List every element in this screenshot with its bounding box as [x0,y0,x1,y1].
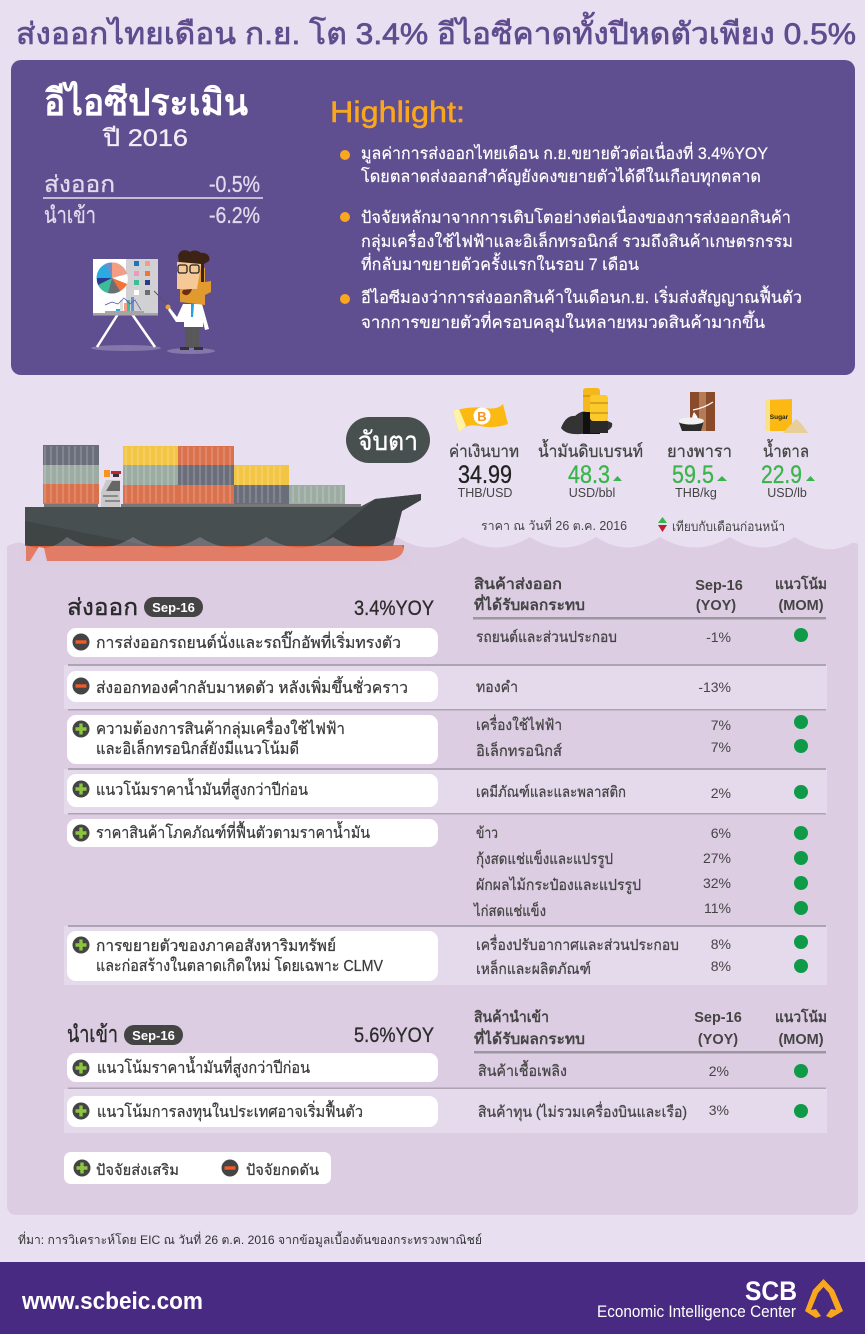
table header: imports: Sep-16 [694,1010,742,1026]
table header: exports: ที่ได้รับผลกระทบ [474,594,585,614]
bullet text 2: ที่กลับมาขยายตัวครั้งแรกในรอบ 7 เดือน [361,252,639,274]
table header: exports: Sep-16 [695,578,743,594]
icon: rubber tree and bowl [678,392,715,431]
bullet text 3 [340,285,802,333]
factor: commodity prices [67,819,438,847]
table header: exports [473,575,827,620]
forecast: imports: -6.2% [209,202,260,228]
forecast: exports: ส่งออก [44,171,115,197]
factor: import oil price: แนวโน้มราคาน้ำมันที่สูงกว่าปีก่อน [97,1056,310,1078]
bullet text 3: จากการขยายตัวที่ครอบคลุมในหลายหมวดสินค้ามากขึ้น [361,310,765,333]
indicator: rubber: THB/kg [675,486,717,500]
factor: domestic investment: แนวโน้มการลงทุนในประเทศอาจเริ่มฟื้นตัว [97,1100,363,1122]
section heading: imports: นำเข้า [67,1021,118,1047]
section heading: exports: ส่งออก [67,594,138,620]
table rows: exports: กุ้งสดแช่แข็งและแปรรูป [476,849,613,869]
factor: real estate and construction [67,931,438,981]
section heading: imports: 5.6%YOY [354,1024,434,1047]
table rows: exports: เคมีภัณฑ์และและพลาสติก [476,784,626,801]
forecast: imports: นำเข้า [44,202,96,228]
factor: passenger cars: การส่งออกรถยนต์นั่งและรถปิ๊กอัพที่เริ่มทรงตัว [96,631,401,652]
table rows: exports: เครื่องปรับอากาศและส่วนประกอบ [476,934,679,954]
factor: real estate and construction: และก่อสร้างในตลาดเกิดใหม่ โดยเฉพาะ CLMV [96,956,383,975]
table header: exports: (YOY) [696,598,736,614]
forecast: exports: -0.5% [209,171,260,197]
section heading: exports: 3.4%YOY [354,597,434,620]
panel: lower background with wave top [7,537,858,1215]
illustration: presenter with chart board [91,250,215,354]
legend: factors: ปัจจัยส่งเสริม [96,1162,179,1179]
heading: EIC forecast: อีไอซีประเมิน [44,80,248,123]
table rows: exports: 11% [704,900,731,916]
factor: electrical and electronics: ความต้องการสินค้ากลุ่มเครื่องใช้ไฟฟ้า [96,717,345,739]
forecast: imports [44,202,260,228]
indicator: brent crude: น้ำมันดิบเบรนท์ [538,439,643,461]
indicator: baht [449,404,519,500]
table rows: exports: ไก่สดแช่แข็ง [473,901,546,920]
table rows: exports: 7% [711,739,731,755]
indicator: brent crude: USD/bbl [569,486,615,500]
forecast: exports [44,171,260,197]
factor: oil price: แนวโน้มราคาน้ำมันที่สูงกว่าปีก่อน [96,778,308,800]
table header: exports: แนวโน้ม [775,575,827,593]
indicator: sugar: USD/lb [767,486,807,500]
table rows: exports: อิเล็กทรอนิกส์ [476,741,562,760]
table header: imports: (YOY) [698,1032,738,1048]
bullet text 3: อีไอซีมองว่าการส่งออกสินค้าในเดือนก.ย. เริ่มส่งสัญญาณฟื้นตัว [361,285,802,307]
table rows: exports: 8% [711,936,731,952]
table header: imports: สินค้านำเข้า [474,1008,549,1026]
factor: oil price [67,774,438,807]
indicator: sugar [761,399,815,500]
bullet text 1: มูลค่าการส่งออกไทยเดือน ก.ย.ขยายตัวต่อเนื่องที่ 3.4%YOY [361,142,768,164]
label pill: watch: จับตา [358,426,418,456]
indicator: sugar: น้ำตาล [763,439,809,461]
indicator: baht: 34.99 [458,461,512,489]
indicator: rubber [667,392,732,500]
legend: factors: ปัจจัยกดดัน [246,1162,319,1179]
factor: commodity prices: ราคาสินค้าโภคภัณฑ์ที่ฟื้นตัวตามราคาน้ำมัน [96,821,370,842]
table rows: exports: ทองคำ [476,679,518,696]
factor: gold [67,671,438,702]
panel: EIC forecast and highlight [11,60,855,375]
table rows: exports: เหล็กและผลิตภัณฑ์ [476,959,591,978]
table header: imports: ที่ได้รับผลกระทบ [474,1028,585,1048]
table header: imports: แนวโน้ม [775,1008,827,1026]
indicator: brent crude: 48.3 [568,461,610,489]
legend: month comparison arrows: เทียบกับเดือนก่อนหน้า [672,519,785,534]
footer [0,1262,865,1334]
heading: Highlight: Highlight: [330,96,465,129]
bullet text 1: โดยตลาดส่งออกสำคัญยังคงขยายตัวได้ดีในเกือบทุกตลาด [361,167,761,187]
table rows: exports: 7% [711,717,731,733]
table header: exports: สินค้าส่งออก [474,575,562,593]
indicator: rubber: 59.5 [672,461,714,489]
indicator: baht: THB/USD [458,486,512,500]
table header: imports: (MOM) [778,1032,824,1048]
factor: domestic investment [67,1096,438,1127]
section heading: imports: Sep-16 [132,1028,175,1043]
indicator: rubber: ยางพารา [667,442,732,461]
label pill: watch [346,417,430,463]
table rows: exports [473,628,808,978]
bullet text 2 [340,206,793,274]
table rows: exports: -13% [698,679,731,695]
table rows: imports: สินค้าเชื้อเพลิง [478,1060,567,1080]
table rows: exports: รถยนต์และส่วนประกอบ [476,629,617,646]
factor: real estate and construction: การขยายตัวของภาคอสังหาริมทรัพย์ [96,936,336,955]
row backgrounds [64,665,827,1133]
indicator: brent crude [538,388,643,500]
illustration: container ship [25,445,421,561]
table rows: exports: เครื่องใช้ไฟฟ้า [476,714,562,734]
bullet text 2: กลุ่มเครื่องใช้ไฟฟ้าและอิเล็กทรอนิกส์ รวมถึงสินค้าเกษตรกรรม [361,230,793,252]
table rows: exports: ผักผลไม้กระป๋องและแปรรูป [476,876,641,894]
factor: import oil price [67,1053,438,1082]
indicator: sugar: 22.9 [761,461,802,489]
indicator: baht: ค่าเงินบาท [449,442,519,461]
table rows: exports: ข้าว [476,825,498,842]
subheading: year: ปี 2016 [102,125,188,152]
section heading: exports [67,594,434,620]
factor: passenger cars [67,628,438,657]
table header: imports [474,1008,827,1054]
factor: gold: ส่งออกทองคำกลับมาหดตัว หลังเพิ่มขึ้นชั่วคราว [96,676,408,697]
source note: ที่มา: การวิเคราะห์โดย EIC ณ วันที่ 26 ต.ค. 2016 จากข้อมูลเบื้องต้นของกระทรวงพาณิชย์ [18,1231,482,1248]
table rows: exports: 27% [703,850,731,866]
water overlay [22,537,412,565]
title: ส่งออกไทยเดือน ก.ย. โต 3.4% อีไอซีคาดทั้งปีหดตัวเพียง 0.5% [16,12,856,51]
table rows: exports: 2% [711,785,731,801]
table rows: imports: สินค้าทุน (ไม่รวมเครื่องบินและเรือ) [478,1101,687,1122]
table rows: imports: 3% [709,1102,729,1118]
table rows: imports: 2% [709,1063,729,1079]
section heading: exports: Sep-16 [152,600,195,615]
bullet text 1 [340,142,768,187]
section heading: imports [67,1021,434,1047]
icon: baht banknote: B [477,409,487,424]
legend: factors [64,1152,331,1184]
factor: electrical and electronics [67,715,438,764]
table header: exports: (MOM) [778,598,824,614]
website: www.scbeic.com [21,1288,203,1315]
table rows: exports: 32% [703,875,731,891]
table rows: exports: 6% [711,825,731,841]
icon: SCB logo [805,1279,843,1318]
note: price date: ราคา ณ วันที่ 26 ต.ค. 2016 [481,517,627,533]
table rows: imports [478,1060,808,1122]
icon: oil barrels [561,388,612,434]
factor: electrical and electronics: และอิเล็กทรอนิกส์ยังมีแนวโน้มดี [96,738,299,758]
table rows: exports: -1% [706,629,731,645]
brand name: SCB [745,1276,797,1306]
footer: Economic Intelligence Center [597,1303,796,1321]
icon: sugar bag: Sugar [770,414,789,421]
table rows: exports: 8% [711,958,731,974]
bullet text 2: ปัจจัยหลักมาจากการเติบโตอย่างต่อเนื่องของการส่งออกสินค้า [361,206,791,227]
